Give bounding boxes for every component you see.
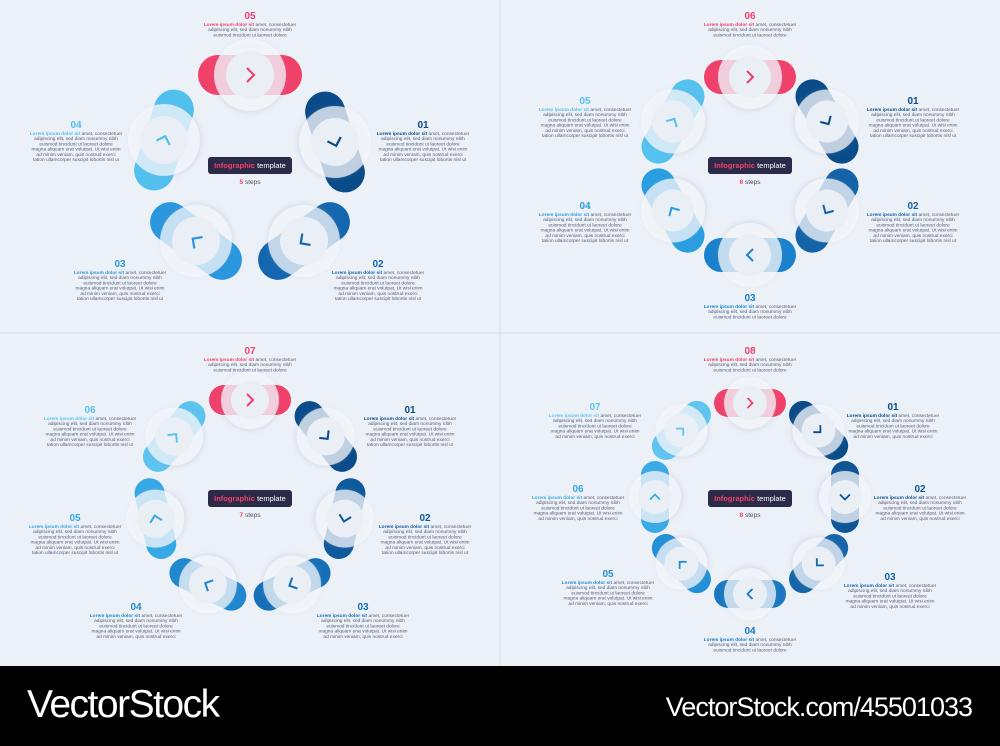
text 04: adipiscing elit, sed diam nonummy nibh xyxy=(94,618,178,624)
text 01: 01 xyxy=(887,402,899,413)
text 04: Lorem ipsum dolor sit amet, consectetuer xyxy=(30,132,122,137)
text 04: Lorem ipsum dolor sit amet, consectetuer xyxy=(704,638,796,643)
text 01: tation ullamcorper suscipit lobortis nisl ut xyxy=(367,442,454,448)
text 08 xyxy=(704,346,797,373)
text 07: 07 xyxy=(589,402,601,413)
text 05: tation ullamcorper suscipit lobortis nisl ut xyxy=(542,133,629,139)
text 03: euismod tincidunt ut laoreet dolore xyxy=(83,280,157,286)
text 04: magna aliquam erat volutpat. Ut wisi enim xyxy=(91,629,181,635)
text 04 xyxy=(704,626,797,653)
url text: VectorStock.com/45501033 xyxy=(666,692,972,722)
text 04: 04 xyxy=(70,120,82,131)
center label xyxy=(708,157,792,186)
text 06: euismod tincidunt ut laoreet dolore xyxy=(53,426,127,432)
node 04 xyxy=(714,568,786,620)
panel: 8 steps xyxy=(532,346,967,653)
text 01: tation ullamcorper suscipit lobortis nisl ut xyxy=(870,133,957,139)
text 04: magna aliquam erat volutpat. Ut wisi enim xyxy=(31,147,121,153)
node 02 xyxy=(241,181,367,301)
text 02: adipiscing elit, sed diam nonummy nibh xyxy=(383,529,467,535)
text 02: magna aliquam erat volutpat. Ut wisi enim xyxy=(868,228,958,234)
text 04 xyxy=(90,602,183,640)
text 01: ad minim veniam, quis nostrud exerci xyxy=(873,128,953,134)
text 05: adipiscing elit, sed diam nonummy nibh xyxy=(543,112,627,118)
text 04: euismod tincidunt ut laoreet dolore xyxy=(713,647,787,653)
node 04 xyxy=(114,79,214,201)
node 03 xyxy=(775,520,862,607)
center label: 5 steps xyxy=(240,179,261,186)
text 01: Lorem ipsum dolor sit amet, consectetuer xyxy=(847,414,939,419)
text 05: adipiscing elit, sed diam nonummy nibh xyxy=(566,585,650,591)
text 02: magna aliquam erat volutpat. Ut wisi enim xyxy=(380,540,470,546)
text 04: euismod tincidunt ut laoreet dolore xyxy=(548,222,622,228)
text 03: ad minim veniam, quis nostrud exerci xyxy=(323,634,403,640)
text 02: 02 xyxy=(372,259,384,270)
text 03: adipiscing elit, sed diam nonummy nibh xyxy=(708,309,792,315)
text 01 xyxy=(364,405,457,448)
text 03: euismod tincidunt ut laoreet dolore xyxy=(853,593,927,599)
text 03: euismod tincidunt ut laoreet dolore xyxy=(326,623,400,629)
text 07: Lorem ipsum dolor sit amet, consectetuer xyxy=(204,358,296,363)
text 05 xyxy=(204,11,297,38)
panel: 7 steps xyxy=(29,346,472,640)
text 01: magna aliquam erat volutpat. Ut wisi enim xyxy=(378,147,468,153)
text 02: adipiscing elit, sed diam nonummy nibh xyxy=(336,275,420,281)
text 05: adipiscing elit, sed diam nonummy nibh xyxy=(208,27,292,33)
node 01 xyxy=(776,66,878,177)
text 07: adipiscing elit, sed diam nonummy nibh xyxy=(208,362,292,368)
center label: Infographic template xyxy=(214,494,286,503)
text 07 xyxy=(204,346,297,373)
text 06: Lorem ipsum dolor sit amet, consectetuer xyxy=(44,417,136,422)
text 01: euismod tincidunt ut laoreet dolore xyxy=(856,423,930,429)
node 06 xyxy=(629,461,681,533)
text 03: adipiscing elit, sed diam nonummy nibh xyxy=(321,618,405,624)
text 03: ad minim veniam, quis nostrud exerci xyxy=(80,291,160,297)
text 05: magna aliquam erat volutpat. Ut wisi enim xyxy=(30,540,120,546)
text 02: Lorem ipsum dolor sit amet, consectetuer xyxy=(867,213,959,218)
text 07: ad minim veniam, quis nostrud exerci xyxy=(555,434,635,440)
text 01: 01 xyxy=(404,405,416,416)
text 02: 02 xyxy=(907,201,919,212)
text 06: magna aliquam erat volutpat. Ut wisi enim xyxy=(45,432,135,438)
text 01: ad minim veniam, quis nostrud exerci xyxy=(370,437,450,443)
text 02: ad minim veniam, quis nostrud exerci xyxy=(873,233,953,239)
text 04: magna aliquam erat volutpat. Ut wisi enim xyxy=(540,228,630,234)
text 06: magna aliquam erat volutpat. Ut wisi enim xyxy=(533,511,623,517)
text 02: Lorem ipsum dolor sit amet, consectetuer xyxy=(379,525,471,530)
text 06: adipiscing elit, sed diam nonummy nibh xyxy=(708,27,792,33)
text 05: 05 xyxy=(579,96,591,107)
panel: 5 steps xyxy=(30,11,470,302)
text 06 xyxy=(532,484,625,522)
text 08: adipiscing elit, sed diam nonummy nibh xyxy=(708,362,792,368)
text 04: 04 xyxy=(130,602,142,613)
center label xyxy=(208,157,292,186)
text 01: adipiscing elit, sed diam nonummy nibh xyxy=(851,418,935,424)
text 01: magna aliquam erat volutpat. Ut wisi enim xyxy=(868,123,958,129)
text 07: euismod tincidunt ut laoreet dolore xyxy=(558,423,632,429)
text 02: tation ullamcorper suscipit lobortis nisl ut xyxy=(870,238,957,244)
text 03: adipiscing elit, sed diam nonummy nibh xyxy=(848,588,932,594)
node 05 xyxy=(118,472,193,565)
text 05: adipiscing elit, sed diam nonummy nibh xyxy=(33,529,117,535)
node 03 xyxy=(133,181,259,301)
text 01: adipiscing elit, sed diam nonummy nibh xyxy=(368,421,452,427)
text 05: tation ullamcorper suscipit lobortis nisl ut xyxy=(32,550,119,556)
text 02: magna aliquam erat volutpat. Ut wisi enim xyxy=(333,286,423,292)
text 03: Lorem ipsum dolor sit amet, consectetuer xyxy=(74,271,166,276)
text 03: 03 xyxy=(114,259,126,270)
text 04: euismod tincidunt ut laoreet dolore xyxy=(99,623,173,629)
text 05: magna aliquam erat volutpat. Ut wisi enim xyxy=(540,123,630,129)
text 03: euismod tincidunt ut laoreet dolore xyxy=(713,314,787,320)
text 04: Lorem ipsum dolor sit amet, consectetuer xyxy=(539,213,631,218)
footer band xyxy=(0,666,1000,746)
text 01: 01 xyxy=(907,96,919,107)
text 06: ad minim veniam, quis nostrud exerci xyxy=(50,437,130,443)
center label: 8 steps xyxy=(740,512,761,519)
text 03: magna aliquam erat volutpat. Ut wisi enim xyxy=(845,599,935,605)
text 06: adipiscing elit, sed diam nonummy nibh xyxy=(536,500,620,506)
text 03 xyxy=(317,602,410,640)
text 04: ad minim veniam, quis nostrud exerci xyxy=(36,152,116,158)
text 07: 07 xyxy=(244,346,256,357)
center label: 6 steps xyxy=(740,179,761,186)
text 04: euismod tincidunt ut laoreet dolore xyxy=(39,141,113,147)
text 02: tation ullamcorper suscipit lobortis nisl ut xyxy=(382,550,469,556)
text 03: Lorem ipsum dolor sit amet, consectetuer xyxy=(704,305,796,310)
text 08: Lorem ipsum dolor sit amet, consectetuer xyxy=(704,358,796,363)
text 06: 06 xyxy=(744,11,756,22)
center label: Infographic template xyxy=(714,494,786,503)
node 07 xyxy=(209,371,291,429)
node 01 xyxy=(278,386,374,487)
center label xyxy=(708,490,792,519)
text 07: euismod tincidunt ut laoreet dolore xyxy=(213,367,287,373)
text 06: tation ullamcorper suscipit lobortis nisl ut xyxy=(47,442,134,448)
text 02 xyxy=(379,513,472,556)
text 02: euismod tincidunt ut laoreet dolore xyxy=(388,534,462,540)
text 01: euismod tincidunt ut laoreet dolore xyxy=(876,117,950,123)
text 02 xyxy=(867,201,960,244)
node 05 xyxy=(622,66,724,177)
text 04: adipiscing elit, sed diam nonummy nibh xyxy=(543,217,627,223)
text 01: Lorem ipsum dolor sit amet, consectetuer xyxy=(377,132,469,137)
text 01 xyxy=(847,402,940,440)
text 01: euismod tincidunt ut laoreet dolore xyxy=(386,141,460,147)
text 03: tation ullamcorper suscipit lobortis nisl ut xyxy=(77,296,164,302)
text 02: euismod tincidunt ut laoreet dolore xyxy=(883,505,957,511)
center label: Infographic template xyxy=(714,161,786,170)
text 05: ad minim veniam, quis nostrud exerci xyxy=(35,545,115,551)
text 03: Lorem ipsum dolor sit amet, consectetuer xyxy=(844,584,936,589)
text 02: ad minim veniam, quis nostrud exerci xyxy=(338,291,418,297)
text 05: ad minim veniam, quis nostrud exerci xyxy=(545,128,625,134)
text 04: 04 xyxy=(744,626,756,637)
text 07: magna aliquam erat volutpat. Ut wisi enim xyxy=(550,429,640,435)
panel: 6 steps xyxy=(539,11,960,320)
text 01: Lorem ipsum dolor sit amet, consectetuer xyxy=(364,417,456,422)
text 06: euismod tincidunt ut laoreet dolore xyxy=(713,32,787,38)
text 02: magna aliquam erat volutpat. Ut wisi enim xyxy=(875,511,965,517)
text 05 xyxy=(29,513,122,556)
node 02 xyxy=(819,461,871,533)
text 01 xyxy=(867,96,960,139)
text 05: magna aliquam erat volutpat. Ut wisi enim xyxy=(563,596,653,602)
center label: 7 steps xyxy=(240,512,261,519)
text 02 xyxy=(332,259,425,302)
center label: Infographic template xyxy=(214,161,286,170)
text 05: Lorem ipsum dolor sit amet, consectetuer xyxy=(29,525,121,530)
text 05: euismod tincidunt ut laoreet dolore xyxy=(571,590,645,596)
text 01: adipiscing elit, sed diam nonummy nibh xyxy=(381,136,465,142)
node 06 xyxy=(704,45,796,109)
text 03: 03 xyxy=(744,293,756,304)
node 06 xyxy=(126,386,222,487)
text 06: euismod tincidunt ut laoreet dolore xyxy=(541,505,615,511)
text 02: 02 xyxy=(419,513,431,524)
text 06 xyxy=(44,405,137,448)
text 05: 05 xyxy=(69,513,81,524)
text 02: tation ullamcorper suscipit lobortis nisl ut xyxy=(335,296,422,302)
text 05: 05 xyxy=(244,11,256,22)
text 01: 01 xyxy=(417,120,429,131)
text 07 xyxy=(549,402,642,440)
node 02 xyxy=(776,155,878,266)
text 02: 02 xyxy=(914,484,926,495)
text 03: adipiscing elit, sed diam nonummy nibh xyxy=(78,275,162,281)
text 07: adipiscing elit, sed diam nonummy nibh xyxy=(553,418,637,424)
text 06: 06 xyxy=(84,405,96,416)
node 01 xyxy=(285,81,385,203)
text 08: euismod tincidunt ut laoreet dolore xyxy=(713,367,787,373)
center label xyxy=(208,490,292,519)
node 02 xyxy=(307,472,382,565)
node 03 xyxy=(704,223,796,287)
text 06: Lorem ipsum dolor sit amet, consectetuer xyxy=(704,23,796,28)
text 04: adipiscing elit, sed diam nonummy nibh xyxy=(708,642,792,648)
text 03 xyxy=(844,572,937,610)
text 03 xyxy=(74,259,167,302)
text 05: ad minim veniam, quis nostrud exerci xyxy=(568,601,648,607)
text 03: 03 xyxy=(884,572,896,583)
text 02: adipiscing elit, sed diam nonummy nibh xyxy=(878,500,962,506)
text 03: ad minim veniam, quis nostrud exerci xyxy=(850,604,930,610)
text 04 xyxy=(30,120,123,163)
text 05: Lorem ipsum dolor sit amet, consectetuer xyxy=(562,581,654,586)
text 02: euismod tincidunt ut laoreet dolore xyxy=(876,222,950,228)
text 04: ad minim veniam, quis nostrud exerci xyxy=(545,233,625,239)
text 06: adipiscing elit, sed diam nonummy nibh xyxy=(48,421,132,427)
node 08 xyxy=(714,377,786,429)
text 02: euismod tincidunt ut laoreet dolore xyxy=(341,280,415,286)
text 05: euismod tincidunt ut laoreet dolore xyxy=(548,117,622,123)
text 04: ad minim veniam, quis nostrud exerci xyxy=(96,634,176,640)
text 01: euismod tincidunt ut laoreet dolore xyxy=(373,426,447,432)
text 03: magna aliquam erat volutpat. Ut wisi enim xyxy=(318,629,408,635)
text 02: adipiscing elit, sed diam nonummy nibh xyxy=(871,217,955,223)
text 04: Lorem ipsum dolor sit amet, consectetuer xyxy=(90,614,182,619)
node 01 xyxy=(775,387,862,474)
text 05 xyxy=(539,96,632,139)
node 05 xyxy=(198,39,302,111)
text 05: Lorem ipsum dolor sit amet, consectetuer xyxy=(539,108,631,113)
text 05: euismod tincidunt ut laoreet dolore xyxy=(213,32,287,38)
logo text: VectorStock xyxy=(27,683,219,726)
text 08: 08 xyxy=(744,346,756,357)
text 04: tation ullamcorper suscipit lobortis nisl ut xyxy=(33,157,120,163)
text 01 xyxy=(377,120,470,163)
text 02: ad minim veniam, quis nostrud exerci xyxy=(385,545,465,551)
text 01: ad minim veniam, quis nostrud exerci xyxy=(853,434,933,440)
node 04 xyxy=(622,155,724,266)
node 05 xyxy=(638,520,725,607)
text 04: 04 xyxy=(579,201,591,212)
text 02: ad minim veniam, quis nostrud exerci xyxy=(880,516,960,522)
text 05: 05 xyxy=(602,569,614,580)
text 03 xyxy=(704,293,797,320)
text 06: 06 xyxy=(572,484,584,495)
text 03: magna aliquam erat volutpat. Ut wisi enim xyxy=(75,286,165,292)
text 04: adipiscing elit, sed diam nonummy nibh xyxy=(34,136,118,142)
text 05: Lorem ipsum dolor sit amet, consectetuer xyxy=(204,23,296,28)
text 01: tation ullamcorper suscipit lobortis nisl ut xyxy=(380,157,467,163)
text 01: magna aliquam erat volutpat. Ut wisi enim xyxy=(365,432,455,438)
text 05 xyxy=(562,569,655,607)
text 07: Lorem ipsum dolor sit amet, consectetuer xyxy=(549,414,641,419)
text 06 xyxy=(704,11,797,38)
node 07 xyxy=(638,387,725,474)
text 02 xyxy=(874,484,967,522)
text 05: euismod tincidunt ut laoreet dolore xyxy=(38,534,112,540)
text 04: tation ullamcorper suscipit lobortis nisl ut xyxy=(542,238,629,244)
node 03 xyxy=(243,540,342,628)
text 03: Lorem ipsum dolor sit amet, consectetuer xyxy=(317,614,409,619)
text 01: Lorem ipsum dolor sit amet, consectetuer xyxy=(867,108,959,113)
text 02: Lorem ipsum dolor sit amet, consectetuer xyxy=(332,271,424,276)
node 04 xyxy=(158,540,257,628)
text 01: magna aliquam erat volutpat. Ut wisi enim xyxy=(848,429,938,435)
text 04 xyxy=(539,201,632,244)
text 03: 03 xyxy=(357,602,369,613)
text 02: Lorem ipsum dolor sit amet, consectetuer xyxy=(874,496,966,501)
text 01: ad minim veniam, quis nostrud exerci xyxy=(383,152,463,158)
text 06: Lorem ipsum dolor sit amet, consectetuer xyxy=(532,496,624,501)
text 01: adipiscing elit, sed diam nonummy nibh xyxy=(871,112,955,118)
text 06: ad minim veniam, quis nostrud exerci xyxy=(538,516,618,522)
